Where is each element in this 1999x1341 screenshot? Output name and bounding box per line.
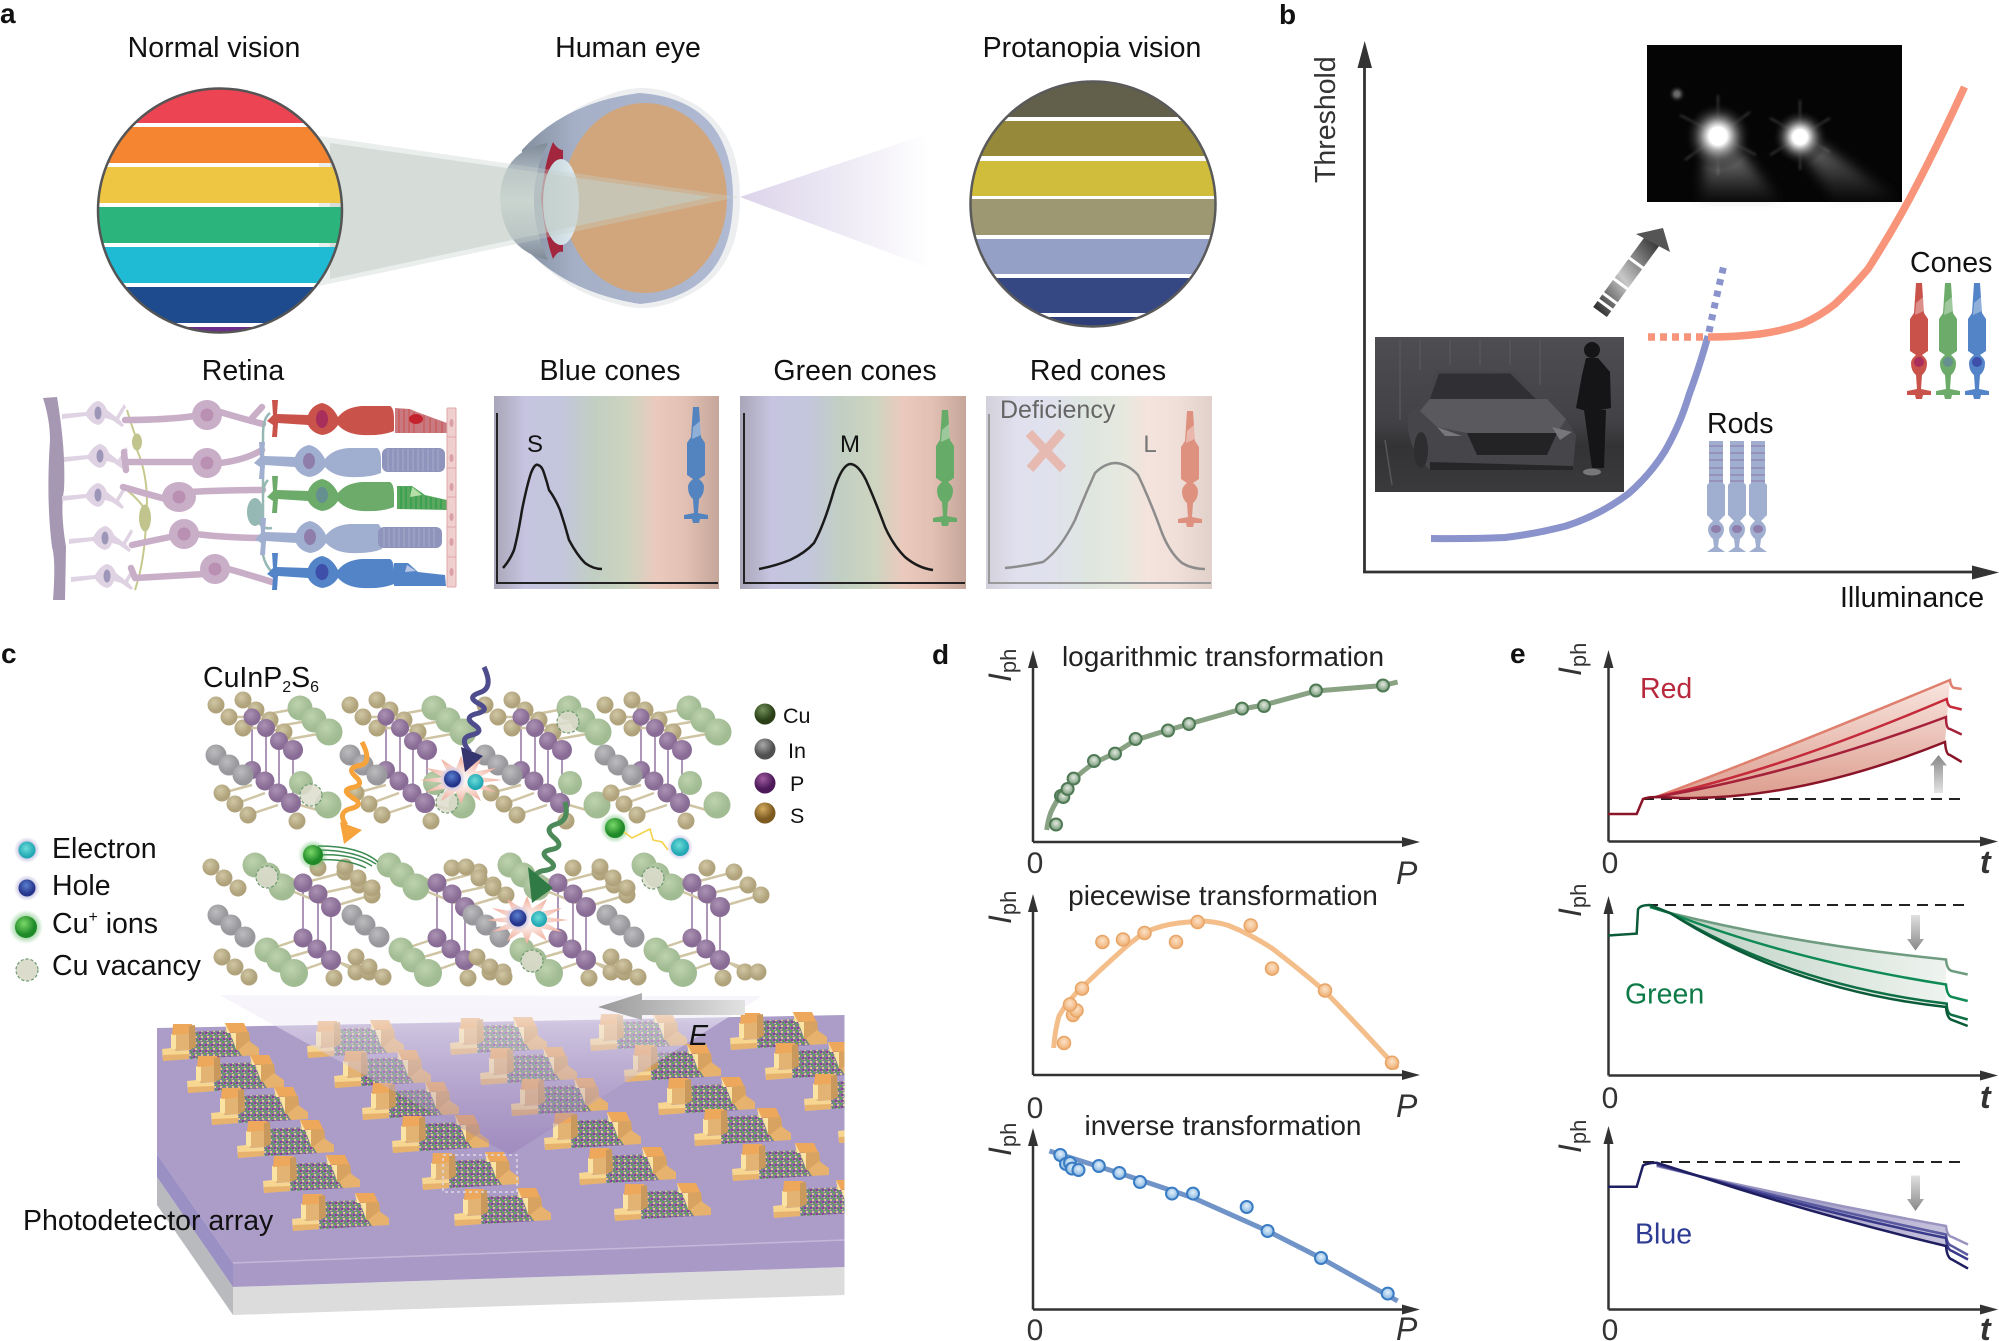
panel label e: e	[1510, 638, 1526, 669]
curve: S response	[503, 465, 602, 569]
curve: L response	[1005, 463, 1205, 569]
chart: logarithmic transformation: 0	[1027, 847, 1043, 880]
legend: charge carriers: Electron	[52, 833, 157, 865]
icons: cone cells	[1907, 283, 1989, 399]
legend: atoms: P	[790, 772, 804, 796]
chart: blue response: Blue	[1635, 1218, 1692, 1250]
chart: inverse transformation: ph	[996, 1123, 1021, 1147]
crystal lattice	[202, 692, 770, 987]
material formula: 2	[282, 679, 291, 696]
legend: atoms: Cu	[783, 704, 810, 728]
panel: blue cones spectrum	[494, 396, 719, 589]
purple light cone behind eye	[740, 133, 930, 268]
legend: atoms: In	[788, 739, 806, 763]
label Deficiency: Deficiency	[1000, 396, 1116, 424]
label: Cones: Cones	[1910, 247, 1992, 279]
chart: red response: Red	[1640, 673, 1692, 705]
legend: charge carriers	[9, 833, 202, 982]
photo: headlights bright image	[1647, 45, 1902, 202]
chart: logarithmic transformation: logarithmic transformation	[1062, 641, 1384, 672]
heading: Retina: Retina	[202, 355, 284, 387]
legend: charge carriers: Cu vacancy	[52, 950, 202, 982]
panel a: colour vision	[0, 0, 1225, 600]
icon: red cone	[1178, 411, 1202, 527]
photoreceptor row: blue-grey	[254, 442, 445, 479]
label L: L	[1143, 431, 1157, 458]
icon: cross mark	[1029, 432, 1063, 469]
chart: green response: 0	[1602, 1082, 1618, 1115]
chart: logarithmic transformation: I	[982, 673, 1018, 682]
chart: green response: I	[1552, 908, 1588, 917]
label: Rods: Rods	[1707, 408, 1774, 440]
chart: green response: t	[1980, 1079, 1992, 1115]
chart: piecewise transformation: 0	[1027, 1092, 1043, 1125]
panel e: temporal response	[1510, 638, 1998, 1341]
curve: rods threshold	[1431, 265, 1724, 539]
y axis	[1358, 41, 1372, 572]
panel label c: c	[1, 638, 17, 669]
x axis	[1363, 566, 1999, 580]
heading: Blue cones: Blue cones	[539, 355, 681, 387]
Cu+ ion moving with trail	[298, 840, 378, 870]
chart: red response: I	[1552, 667, 1588, 676]
chart: piecewise transformation	[982, 880, 1420, 1125]
photodetector array substrate	[157, 995, 844, 1315]
legend: charge carriers: Hole	[52, 870, 111, 902]
protanopia colour disc	[965, 75, 1225, 332]
normal vision colour disc	[90, 80, 350, 337]
arrow: blue light wave	[461, 667, 488, 772]
photoreceptor row: blue	[267, 553, 446, 590]
chart: blue response: I	[1552, 1144, 1588, 1153]
photo: car and person low-light image	[1375, 337, 1624, 492]
chart: piecewise transformation: ph	[996, 891, 1021, 915]
axis title: Illuminance: Illuminance	[1840, 582, 1984, 614]
chart: inverse transformation	[982, 1110, 1420, 1341]
label E: E	[689, 1020, 709, 1052]
photoreceptor row: blue-grey lower	[255, 518, 442, 555]
photoreceptor row: green	[267, 476, 447, 513]
heading: Red cones: Red cones	[1030, 355, 1166, 387]
material formula: S	[291, 662, 310, 694]
person	[1576, 342, 1611, 468]
chart: inverse transformation: I	[982, 1147, 1018, 1156]
arrow: green light wave	[528, 802, 566, 903]
legend: charge carriers: ions	[98, 908, 158, 940]
legend: atoms	[754, 704, 810, 828]
chart: blue response: ph	[1566, 1120, 1591, 1144]
exciton burst lower	[486, 896, 568, 944]
chart: red response: 0	[1602, 847, 1618, 880]
panel d: transformations	[932, 639, 1420, 1341]
heading: Green cones: Green cones	[773, 355, 937, 387]
curve: cones threshold	[1648, 87, 1964, 337]
chart: green response	[1552, 884, 1998, 1115]
chart: blue response	[1552, 1120, 1998, 1341]
chart: logarithmic transformation: P	[1396, 855, 1418, 891]
arrow: electric field	[598, 993, 745, 1020]
legend: charge carriers: Cu	[52, 908, 88, 940]
material formula: 6	[310, 679, 319, 696]
curve: M response	[759, 464, 933, 570]
panel label d: d	[932, 639, 949, 670]
chart: red response: t	[1980, 844, 1992, 880]
panel: red cones spectrum with deficiency	[986, 396, 1212, 589]
heading: Normal vision: Normal vision	[128, 32, 300, 64]
icons: rod cells	[1707, 441, 1767, 552]
chart: logarithmic transformation	[982, 641, 1420, 891]
panel b: threshold vs illuminance	[1279, 0, 1999, 614]
chart: red response	[1552, 643, 1998, 880]
grey light beam into eye	[319, 136, 738, 286]
icon: blue cone	[684, 407, 708, 523]
gradient arrow	[1600, 228, 1670, 312]
icon: human eye	[500, 88, 740, 308]
legend: charge carriers: +	[88, 909, 98, 926]
car	[1408, 370, 1576, 470]
panel c: CuInP2S6 photodetector	[2, 648, 844, 1315]
chart: piecewise transformation: I	[982, 915, 1018, 924]
material formula: CuInP	[203, 662, 282, 694]
device grid	[162, 1012, 844, 1231]
pigment epithelium	[447, 408, 456, 587]
Cu+ ion and electron with yellow link	[600, 813, 693, 860]
label: Photodetector array: Photodetector array	[23, 1205, 274, 1237]
label S: S	[527, 431, 543, 458]
chart: piecewise transformation: P	[1396, 1088, 1418, 1124]
chart: logarithmic transformation: ph	[996, 649, 1021, 673]
heading: Protanopia vision: Protanopia vision	[983, 32, 1201, 64]
retina diagram	[43, 397, 456, 600]
icon: green cone	[933, 410, 957, 526]
axis title: Threshold: Threshold	[1310, 56, 1342, 183]
chart: inverse transformation: inverse transformation	[1084, 1110, 1362, 1141]
legend: atoms: S	[790, 804, 804, 828]
heading: Human eye: Human eye	[555, 32, 701, 64]
chart: green response: Green	[1625, 978, 1704, 1010]
photoreceptor row: red	[267, 400, 447, 437]
chart: red response: ph	[1566, 643, 1591, 667]
exciton burst upper	[420, 756, 502, 804]
panel: green cones spectrum	[740, 396, 966, 589]
arrow: orange light wave	[340, 742, 367, 844]
chart: green response: ph	[1566, 884, 1591, 908]
label M: M	[840, 431, 860, 458]
chart: piecewise transformation: piecewise transformation	[1068, 880, 1378, 911]
